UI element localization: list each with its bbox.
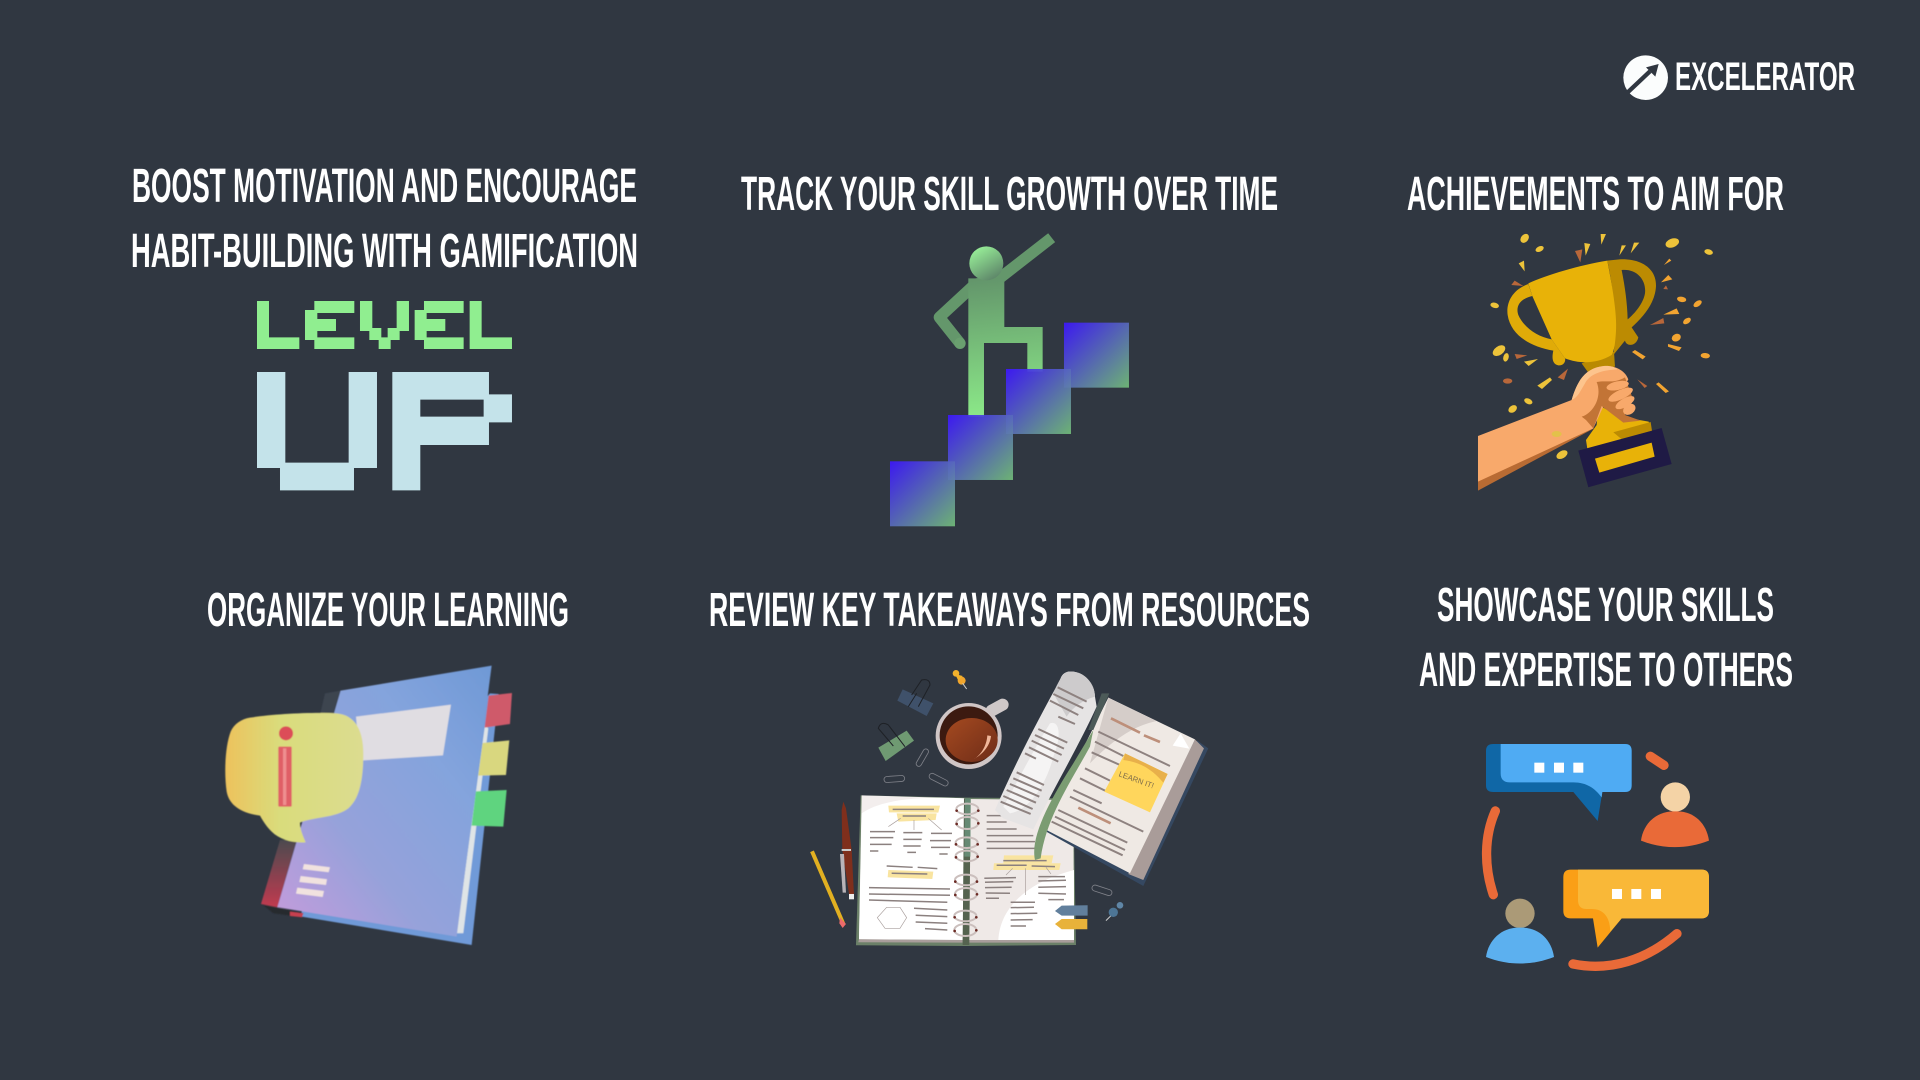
blue speech bubble <box>1486 744 1632 821</box>
yellow speech bubble <box>1563 870 1709 948</box>
open book <box>995 672 1208 886</box>
icon: figure climbing stairs <box>890 238 1129 526</box>
coffee cup <box>936 703 1003 769</box>
icon: level up pixel text <box>257 301 512 490</box>
person: orange <box>1641 782 1709 847</box>
pins <box>953 670 1123 921</box>
logo: Excelerator <box>1623 55 1855 100</box>
orange connecting arcs <box>1487 756 1677 966</box>
spiral notebook <box>856 795 1076 946</box>
open book: LEARN IT! <box>1118 769 1155 790</box>
icon: arrow in circle <box>1623 55 1668 100</box>
heading: gamification <box>131 160 638 278</box>
heading: gamification: HABIT-BUILDING WITH GAMIFICATION <box>131 225 638 278</box>
pen and pencil <box>812 802 854 928</box>
paper clips <box>884 748 1113 896</box>
icon: hand holding trophy <box>1478 232 1714 491</box>
heading: organize learning: ORGANIZE YOUR LEARNING <box>207 584 569 637</box>
heading: track skill growth: TRACK YOUR SKILL GROWTH OVER TIME <box>741 168 1278 221</box>
heading: gamification: BOOST MOTIVATION AND ENCOURAGE <box>132 160 637 213</box>
heading: review takeaways: REVIEW KEY TAKEAWAYS FROM RESOURCES <box>709 584 1310 637</box>
icon: two people chatting <box>1486 744 1709 966</box>
icon: open notebooks, coffee and stationery <box>812 670 1208 946</box>
heading: showcase skills <box>1419 579 1793 697</box>
confetti <box>1490 232 1714 461</box>
binder clips <box>878 680 933 761</box>
sticky tabs <box>1055 905 1088 929</box>
icon: notebook with info bubble <box>225 666 512 945</box>
person: blue <box>1486 899 1554 963</box>
